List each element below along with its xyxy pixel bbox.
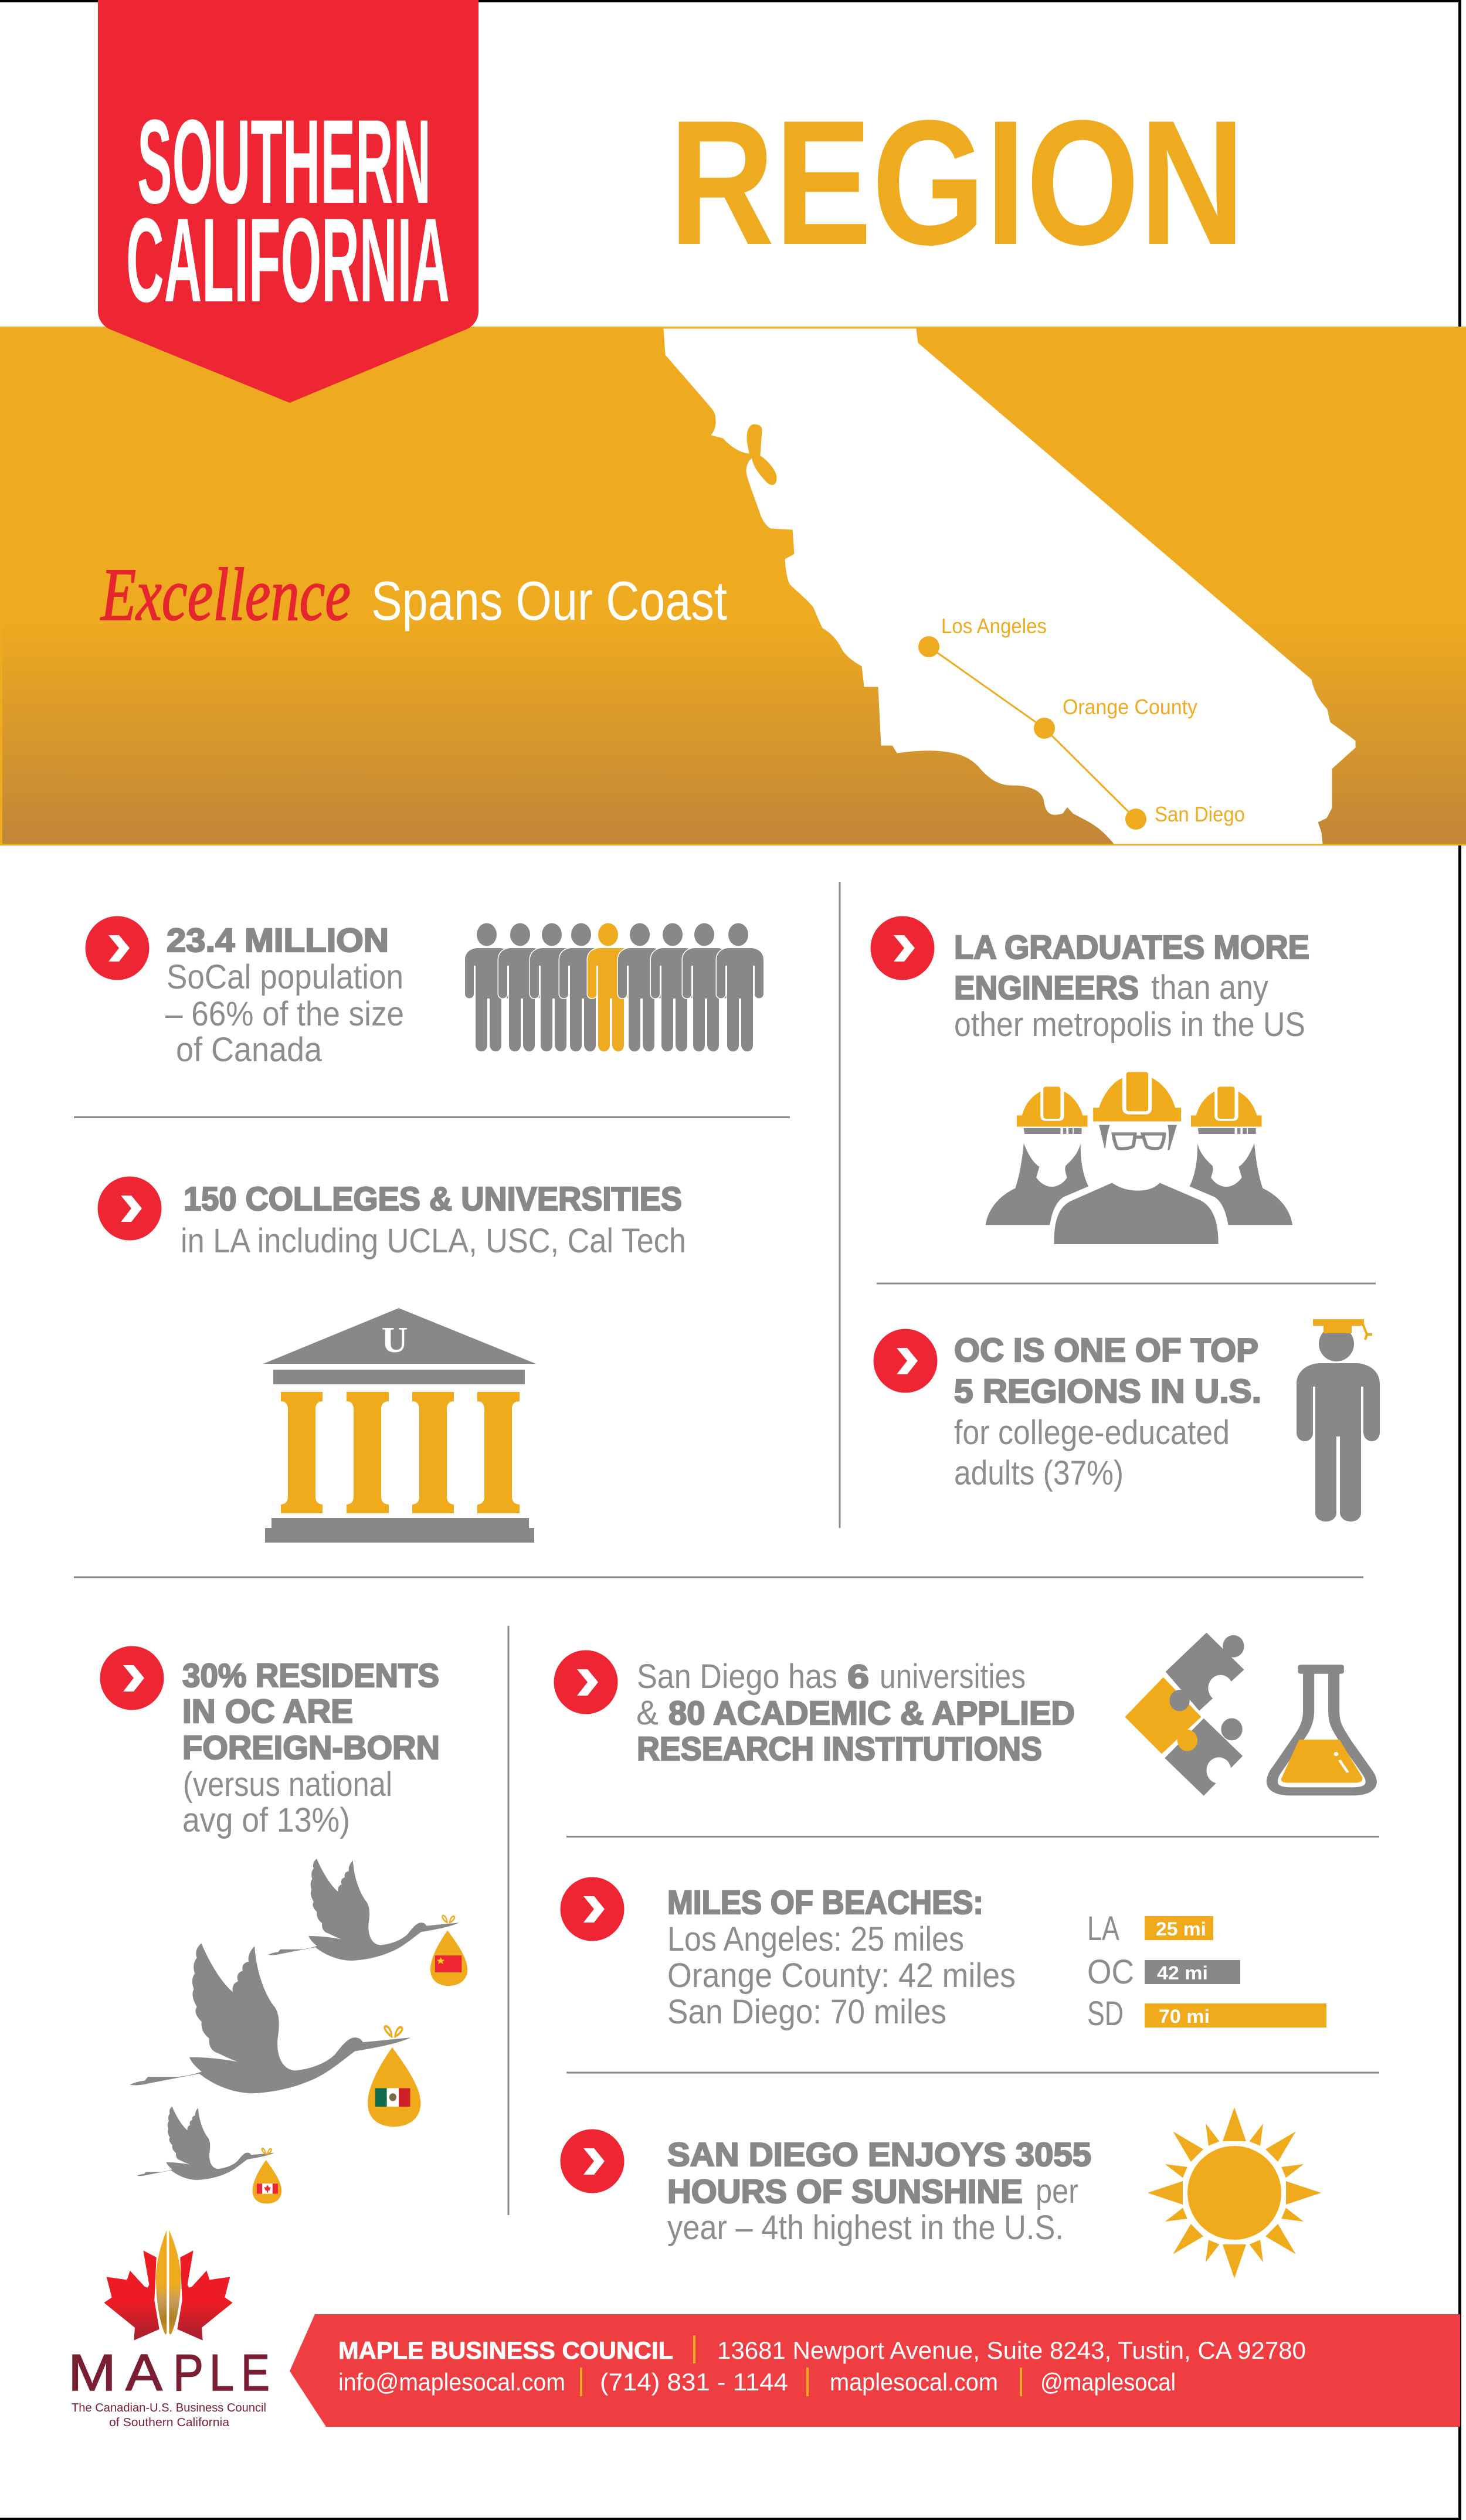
logo tagline [72, 2402, 266, 2429]
sunshine text: HOURS OF SUNSHINE [667, 2173, 1023, 2210]
research text: & [636, 1694, 659, 1732]
engineers heading [954, 929, 1309, 1044]
icon: puzzle [1124, 1633, 1244, 1797]
California map [664, 329, 1355, 844]
tagline rest: Spans Our Coast [371, 570, 727, 631]
college-educated heading: OC IS ONE OF TOP [954, 1332, 1258, 1369]
panel: engineers [870, 916, 1309, 1244]
icon: sun [1148, 2107, 1321, 2278]
bar chart: miles of beaches [1087, 1910, 1326, 2033]
foreign-born heading: 30% RESIDENTS [182, 1657, 439, 1694]
engineers heading: ENGINEERS [954, 969, 1139, 1007]
bullet icon [870, 916, 935, 980]
stork: China [268, 1859, 467, 1986]
college-educated heading: 5 REGIONS IN U.S. [954, 1373, 1261, 1410]
red banner: SOUTHERN [137, 95, 431, 229]
research text: San Diego has [637, 1658, 837, 1696]
footer address: 13681 Newport Avenue, Suite 8243, Tustin, CA 92780 [717, 2336, 1306, 2364]
beaches heading: MILES OF BEACHES: [667, 1884, 983, 1921]
bar chart: miles of beaches: 42 mi [1157, 1962, 1208, 1984]
engineers heading: LA GRADUATES MORE [954, 929, 1309, 966]
logo wordmark: M [68, 2344, 116, 2402]
foreign-born heading: FOREIGN-BORN [182, 1729, 440, 1767]
research text: universities [880, 1658, 1026, 1696]
research text [636, 1658, 1075, 1768]
bar chart: miles of beaches: 70 mi [1159, 2006, 1210, 2027]
panel: college-educated [874, 1319, 1380, 1521]
population text: of Canada [176, 1031, 323, 1069]
beaches text: San Diego: 70 miles [667, 1993, 946, 2031]
icon: storks carrying flags [130, 1859, 467, 2203]
label: Orange County: Orange County [1063, 695, 1197, 719]
sunshine text: SAN DIEGO ENJOYS 3055 [667, 2136, 1091, 2173]
engineers heading: other metropolis in the US [954, 1006, 1305, 1044]
tagline [100, 553, 727, 636]
panel: foreign-born residents [100, 1646, 467, 2203]
foreign-born text: avg of 13%) [182, 1801, 350, 1839]
tagline word: Excellence: Excellence [100, 553, 351, 636]
bullet icon [100, 1646, 164, 1710]
footer contact banner [290, 2314, 1460, 2427]
logo: Maple [68, 2230, 270, 2429]
bullet icon [554, 1650, 618, 1714]
foreign-born text [182, 1765, 392, 1839]
bar chart: miles of beaches: 25 mi [1156, 1918, 1206, 1940]
colleges text: in LA including UCLA, USC, Cal Tech [181, 1222, 686, 1260]
bullet icon [874, 1329, 937, 1393]
logo wordmark [68, 2344, 270, 2402]
logo wordmark: A [125, 2344, 162, 2402]
sunshine text: year – 4th highest in the U.S. [667, 2209, 1064, 2247]
text: CALIFORNIA [126, 193, 450, 327]
icons: puzzle and flask [1124, 1633, 1371, 1797]
marker: Orange County [1034, 718, 1055, 739]
population heading: 23.4 MILLION [167, 922, 389, 959]
college-educated heading [954, 1332, 1261, 1410]
sunshine text: per [1036, 2172, 1078, 2210]
panel: sunshine [561, 2107, 1321, 2278]
icon: university building: U [382, 1320, 408, 1360]
panel: San Diego research [554, 1633, 1371, 1797]
beaches text: Orange County: 42 miles [667, 1957, 1016, 1995]
bar chart: miles of beaches: OC [1087, 1953, 1134, 1991]
footer social handle: @maplesocal [1040, 2368, 1176, 2396]
research text: 6 [847, 1658, 869, 1696]
bullet icon [86, 916, 149, 980]
logo tagline: The Canadian-U.S. Business Council [72, 2402, 266, 2414]
foreign-born heading [182, 1657, 440, 1767]
stork: Mexico [130, 1943, 420, 2127]
icon: flask [1272, 1665, 1371, 1791]
stork: Canada [137, 2107, 281, 2203]
panel: population [86, 916, 763, 1069]
logo wordmark: E [241, 2344, 270, 2402]
engineers heading: than any [1151, 969, 1268, 1007]
logo wordmark: L [209, 2344, 234, 2402]
population text: – 66% of the size [165, 995, 404, 1033]
label: San Diego: San Diego [1155, 802, 1245, 826]
college-educated text: for college-educated [954, 1414, 1230, 1452]
foreign-born text: (versus national [183, 1765, 392, 1804]
label: Los Angeles: Los Angeles [941, 614, 1047, 638]
logo tagline: of Southern California [109, 2416, 230, 2429]
icon: university building [263, 1308, 536, 1543]
research text: 80 ACADEMIC & APPLIED [668, 1694, 1075, 1732]
population text: SoCal population [167, 958, 403, 996]
bullet icon [561, 1877, 624, 1941]
icon: maple leaf [104, 2230, 233, 2341]
colleges heading: 150 COLLEGES & UNIVERSITIES [184, 1180, 682, 1218]
college-educated text [954, 1414, 1230, 1492]
footer phone: (714) 831 - 1144 [600, 2368, 788, 2396]
title: Region: REGION [669, 84, 1245, 282]
bar chart: miles of beaches: LA [1087, 1910, 1119, 1948]
college-educated text: adults (37%) [954, 1454, 1124, 1492]
map city markers [918, 614, 1245, 830]
panel: colleges [97, 1176, 686, 1543]
beaches text [667, 1920, 1016, 2031]
icon: engineers in hard hats [986, 1072, 1292, 1244]
panel: beaches [561, 1877, 1326, 2033]
footer organisation name: MAPLE BUSINESS COUNCIL [338, 2336, 673, 2364]
bullet icon [561, 2130, 624, 2193]
gold map band [0, 327, 1466, 845]
bar chart: miles of beaches: SD [1087, 1995, 1124, 2033]
marker: Los Angeles [918, 636, 939, 657]
sunshine text [667, 2136, 1091, 2247]
footer email: info@maplesocal.com [338, 2368, 565, 2396]
logo wordmark: P [173, 2344, 203, 2402]
population text [165, 958, 404, 1069]
bullet icon [97, 1176, 162, 1241]
marker: San Diego [1125, 809, 1146, 830]
red banner [98, 0, 479, 403]
icon: graduate [1297, 1319, 1380, 1521]
research text: RESEARCH INSTITUTIONS [637, 1730, 1042, 1768]
foreign-born heading: IN OC ARE [182, 1693, 353, 1730]
footer website: maplesocal.com [830, 2368, 998, 2396]
icon: row of people [465, 923, 763, 1051]
beaches text: Los Angeles: 25 miles [667, 1920, 964, 1958]
